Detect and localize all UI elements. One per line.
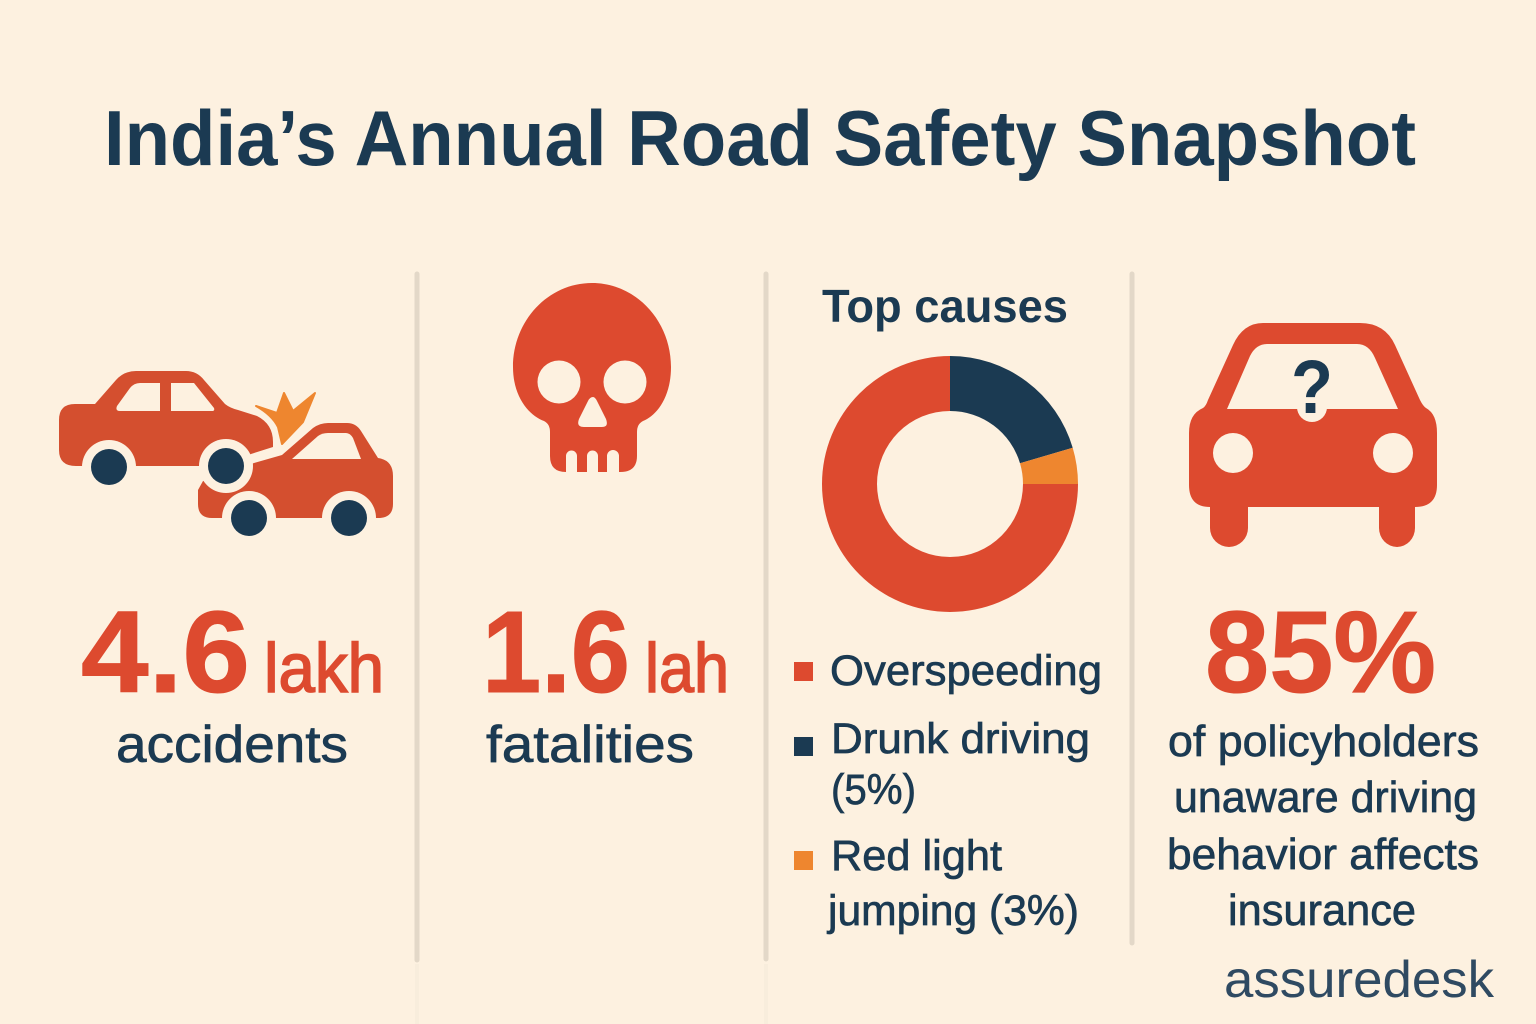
legend item: overspeeding: Overspeeding (830, 647, 1102, 695)
legend (794, 647, 1102, 935)
stat: 4.6 lakh: 4.6 (81, 587, 250, 717)
donut chart (822, 356, 1078, 612)
stat: 1.6 lah: 1.6 (482, 587, 630, 717)
stat: 4.6 lakh (81, 587, 384, 717)
icon: car front with question mark: ? (1291, 345, 1333, 430)
stat: 85%: 85% (1205, 587, 1436, 717)
legend item: red light jumping (794, 832, 1079, 935)
icon: two cars colliding (59, 371, 393, 545)
legend item: drunk driving: Drunk driving (831, 715, 1090, 763)
stat: 1.6 lah (482, 587, 729, 717)
panel: policyholders (1167, 323, 1479, 935)
label: fatalities: fatalities (486, 716, 694, 774)
icon: car front with question mark (1189, 323, 1437, 547)
stat: 4.6 lakh: lakh (264, 629, 384, 707)
panel: top causes (794, 280, 1102, 935)
description text: insurance (1228, 886, 1416, 935)
legend item: drunk driving: (5%) (831, 766, 916, 814)
description text: of policyholders (1168, 717, 1479, 766)
brand wordmark: assuredesk (1224, 951, 1495, 1009)
description text: behavior affects (1167, 830, 1479, 879)
stat: 1.6 lah: lah (645, 629, 729, 707)
legend item: red light jumping: Red light (831, 832, 1002, 880)
legend item: red light jumping: jumping (3%) (826, 887, 1079, 935)
label: accidents: accidents (116, 716, 348, 774)
icon: skull (513, 283, 671, 472)
heading: top causes: Top causes (822, 280, 1068, 332)
description text (1167, 717, 1479, 935)
panel: accidents (59, 371, 393, 774)
legend item: drunk driving (794, 715, 1090, 814)
panel: fatalities (482, 283, 729, 774)
description text: unaware driving (1174, 773, 1477, 822)
title: India’s Annual Road Safety Snapshot (104, 94, 1416, 182)
